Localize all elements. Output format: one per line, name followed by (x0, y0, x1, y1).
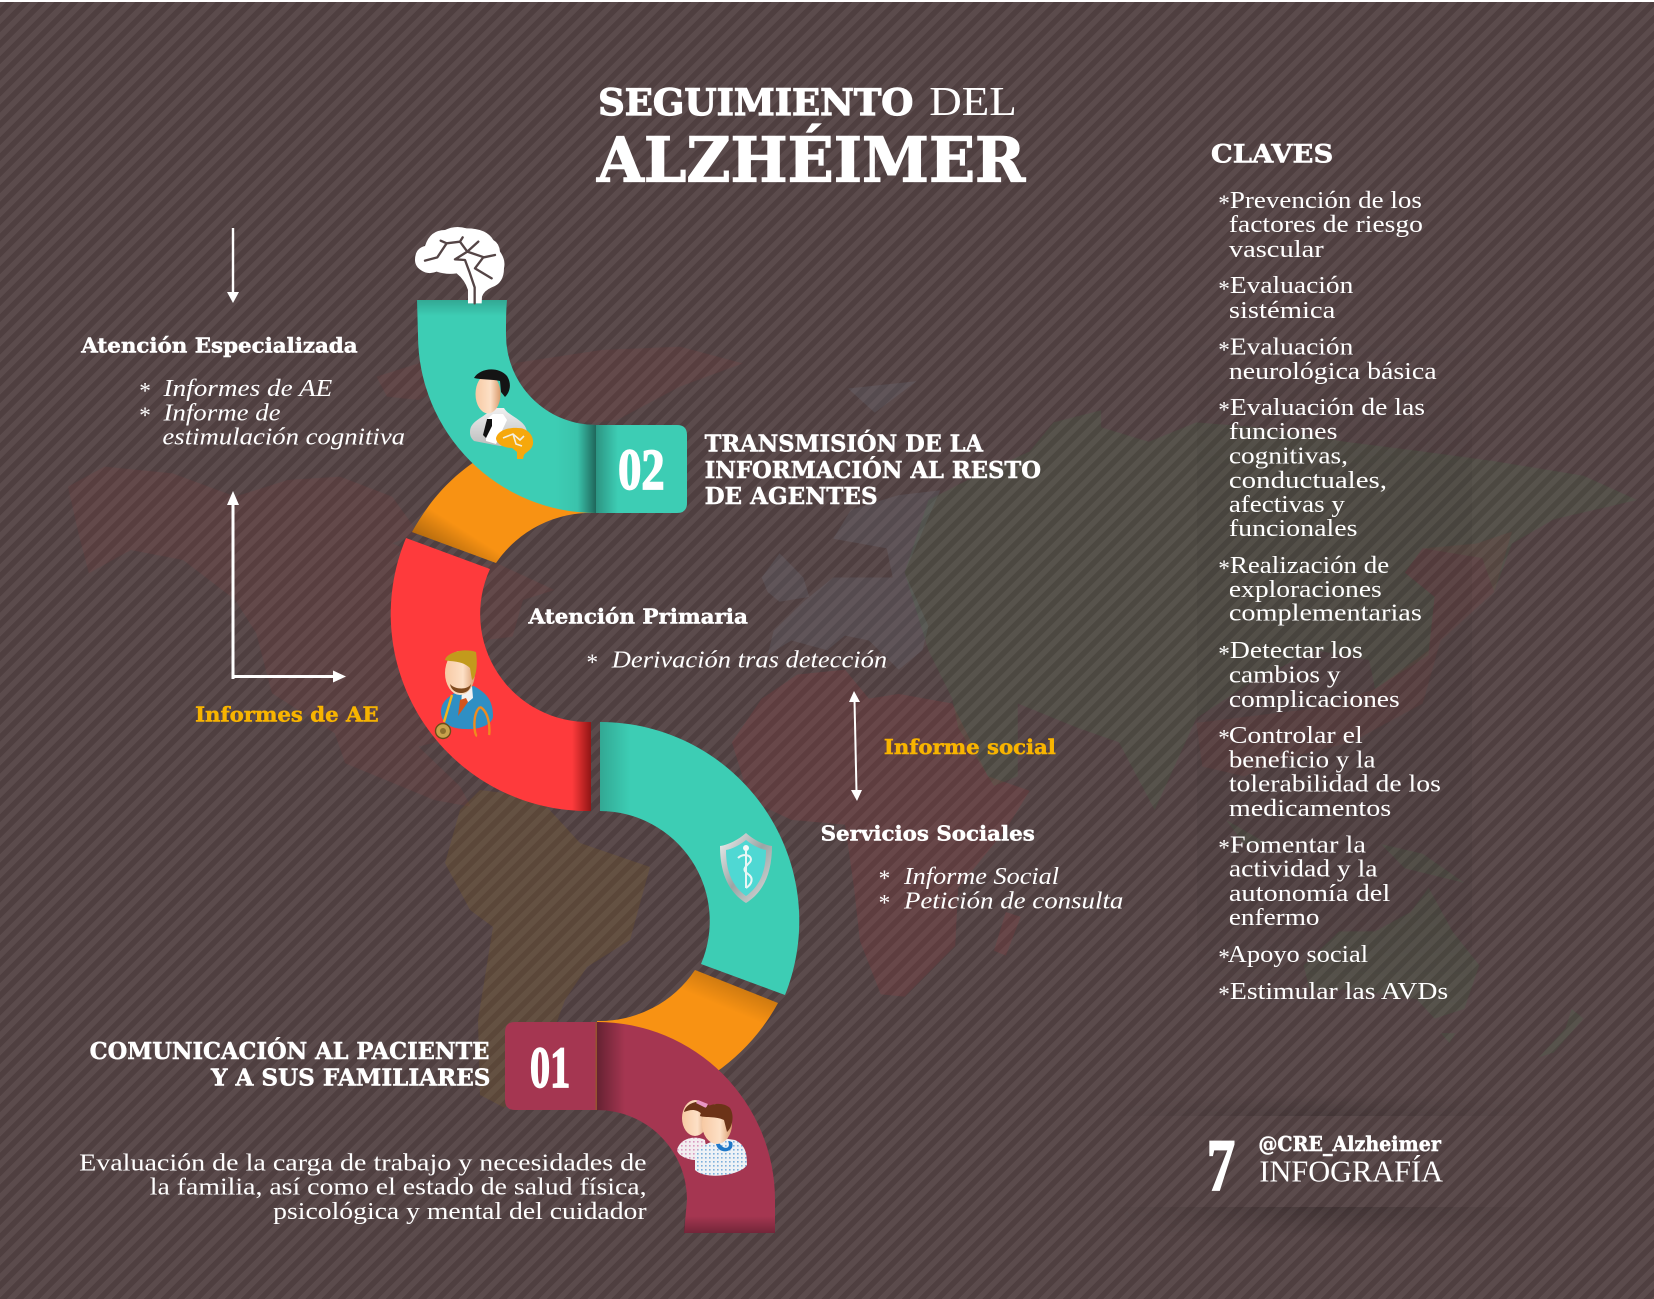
list: claves: neurológica básica (1229, 358, 1437, 385)
number 01: 01 (530, 1035, 570, 1100)
list: claves: factores de riesgo (1229, 211, 1423, 238)
list: claves: * (1218, 726, 1230, 752)
ribbon: top teal arc with tab 02 (417, 300, 687, 513)
heading: claves: CLAVES (1211, 138, 1333, 168)
list: claves: Evaluación de las (1230, 394, 1425, 421)
text layer (79, 78, 1448, 1225)
block: servicios sociales: * (879, 866, 890, 892)
list: claves: sistémica (1229, 297, 1336, 324)
list: claves: Realización de (1230, 552, 1389, 579)
list: claves: exploraciones (1229, 576, 1382, 603)
list: claves: funcionales (1229, 515, 1358, 542)
list: claves: conductuales, (1229, 467, 1387, 494)
ribbon: lower orange segment (597, 970, 778, 1073)
icon: doctor with orange brain (470, 369, 533, 459)
list: claves: * (1218, 191, 1230, 217)
block: servicios sociales: Servicios Sociales (821, 822, 1035, 846)
panel shading behind claves (1197, 330, 1472, 1015)
title (596, 78, 1027, 196)
list: claves: complementarias (1229, 600, 1422, 627)
map: South-East Asia (1196, 531, 1512, 776)
list: claves: * (1218, 945, 1230, 971)
list: claves (1218, 187, 1448, 1008)
list: claves: tolerabilidad de los (1229, 771, 1441, 798)
list: claves: Detectar los (1230, 637, 1363, 664)
list: claves: * (1218, 641, 1230, 667)
block: atención primaria: Derivación tras detección (611, 647, 887, 674)
block: atención primaria (527, 604, 887, 676)
ribbon: upper orange segment (412, 460, 596, 563)
map: Europe, Africa and Asia (732, 381, 1637, 1057)
map: Europe (762, 381, 940, 670)
ribbon: red arc (391, 538, 591, 811)
list: claves: Fomentar la (1230, 831, 1366, 858)
icon: medical shield (720, 833, 772, 903)
arrow: double-headed informe social (849, 691, 862, 801)
icon: two patients (677, 1100, 747, 1176)
text: evaluación de la carga: psicológica y mental del cuidador (273, 1198, 647, 1225)
block: servicios sociales: Petición de consulta (903, 888, 1123, 915)
map: Africa (732, 670, 1030, 997)
list: claves: beneficio y la (1229, 746, 1376, 773)
icon: white brain (415, 227, 504, 303)
list: claves: vascular (1229, 236, 1324, 263)
map: Australia and Oceania (1226, 820, 1583, 1057)
text: evaluación de la carga (79, 1149, 647, 1225)
handle: @CRE_Alzheimer (1258, 1132, 1441, 1156)
footer shadow band (1210, 1107, 1445, 1224)
list: claves: * (1218, 276, 1230, 302)
world map (68, 347, 1637, 1108)
label: informes de AE: Informes de AE (195, 702, 379, 726)
heading: comunicación al paciente: Y A SUS FAMILIARES (210, 1064, 490, 1091)
block: atención especializada: Atención Especializada (80, 333, 358, 357)
number 7: 7 (1207, 1124, 1235, 1206)
block: atención especializada: Informe de (162, 399, 281, 426)
list: claves: cognitivas, (1229, 443, 1348, 470)
ribbon: crimson arc with tab 01 (505, 1022, 775, 1233)
title: ALZHÉIMER (596, 123, 1027, 196)
heading: comunicación al paciente: COMUNICACIÓN AL PACIENTE (90, 1038, 489, 1065)
list: claves: Evaluación (1230, 333, 1353, 360)
list: claves: actividad y la (1229, 856, 1378, 883)
block: atención especializada: * (139, 379, 151, 405)
label: informe social: Informe social (884, 735, 1056, 759)
list: claves: Controlar el (1229, 722, 1363, 749)
heading: transmisión de la información: DE AGENTES (705, 483, 878, 510)
heading: comunicación al paciente (90, 1038, 490, 1091)
list: claves: Estimular las AVDs (1230, 978, 1448, 1005)
heading: transmisión de la información (705, 430, 1041, 510)
list: claves: * (1218, 338, 1230, 364)
block: atención especializada (80, 333, 405, 451)
list: claves: Evaluación (1230, 272, 1353, 299)
block: atención especializada: * (139, 403, 151, 429)
list: claves: * (1218, 835, 1230, 861)
list: claves: * (1218, 398, 1230, 424)
title: SEGUIMIENTO (598, 80, 913, 124)
icon: doctor with stethoscope (436, 650, 493, 738)
list: claves: afectivas y (1229, 491, 1346, 518)
block: atención especializada: estimulación cognitiva (162, 424, 405, 451)
text: evaluación de la carga: Evaluación de la carga de trabajo y necesidades de (79, 1149, 647, 1176)
heading: transmisión de la información: INFORMACIÓN AL RESTO (705, 457, 1041, 484)
list: claves: medicamentos (1229, 795, 1391, 822)
map: South America (445, 790, 650, 1108)
title: DEL (929, 78, 1017, 124)
arrow: down to atención especializada (227, 228, 239, 303)
ribbon: lower teal arc (600, 722, 799, 995)
block: servicios sociales (821, 822, 1123, 916)
arrow: up and right L-shaped (227, 491, 346, 682)
map: Asia (905, 410, 1637, 810)
text: evaluación de la carga: la familia, así como el estado de salud física, (150, 1174, 647, 1201)
block: servicios sociales: Informe Social (903, 863, 1059, 890)
map: North America and Greenland (68, 347, 743, 807)
heading: transmisión de la información: TRANSMISIÓN DE LA (705, 430, 984, 457)
label infografia: INFOGRAFÍA (1259, 1153, 1443, 1188)
block: atención primaria: Atención Primaria (527, 604, 748, 628)
list: claves: Prevención de los (1230, 187, 1422, 214)
list: claves: Apoyo social (1228, 941, 1368, 968)
list: claves: cambios y (1229, 661, 1342, 688)
list: claves: enfermo (1229, 904, 1320, 931)
list: claves: funciones (1229, 418, 1337, 445)
s-shaped ribbon (391, 300, 799, 1233)
block: atención especializada: Informes de AE (162, 375, 332, 402)
top white edge (0, 0, 1654, 2)
block: servicios sociales: * (879, 890, 890, 916)
list: claves: autonomía del (1229, 880, 1391, 907)
list: claves: * (1218, 982, 1230, 1008)
number 02: 02 (618, 437, 665, 502)
list: claves: complicaciones (1229, 686, 1400, 713)
block: atención primaria: * (586, 650, 598, 676)
footer credit (1207, 1124, 1443, 1206)
list: claves: * (1218, 556, 1230, 582)
